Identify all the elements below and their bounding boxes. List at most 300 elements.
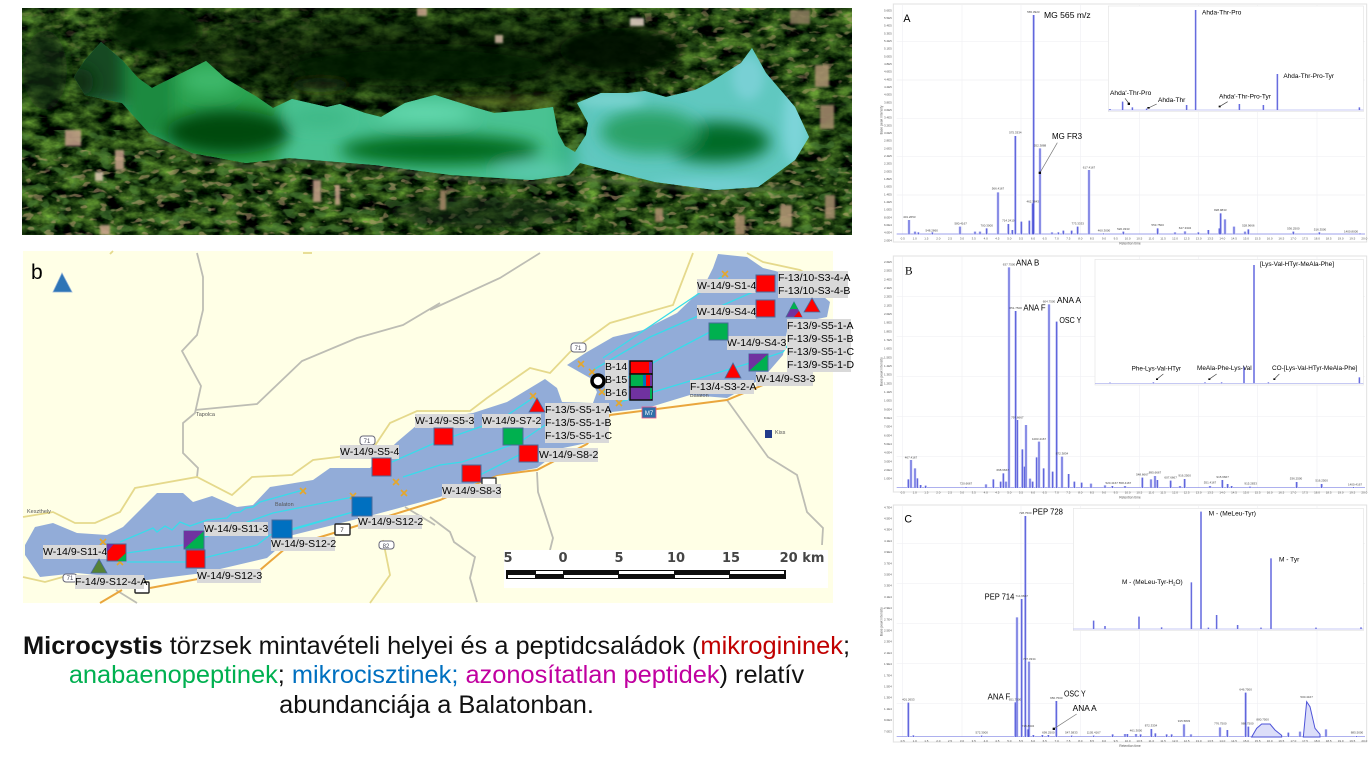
axis A labels: 1.5 [924, 236, 929, 240]
axis B labels: 6.0E4 [884, 433, 892, 437]
B peak labels: 548.6667 [1136, 473, 1149, 477]
C peak labels: 872.3334 [1145, 724, 1158, 728]
site labels: W-14/9-S8-2 [539, 449, 598, 461]
axis B labels: 2.0 [936, 490, 941, 494]
cyan transect lines [120, 274, 790, 562]
axis B labels: 16.5 [1278, 490, 1285, 494]
axis C labels: 3.0 [960, 739, 964, 743]
axis A labels: 3.5 [972, 236, 976, 240]
axis C labels: 17.0 [1290, 739, 1297, 743]
axis B labels: 1.0 [913, 490, 917, 494]
B peak labels: 915.2833 [1244, 482, 1257, 486]
C peak labels: 880.7500 [1256, 718, 1269, 722]
C peak labels: 699.2500 [1042, 730, 1055, 734]
axis A labels: 14.0 [1219, 236, 1226, 240]
panel letter b: b [31, 261, 43, 284]
axis A labels: 11.5 [1160, 236, 1166, 240]
chromatogram A trace [897, 15, 1365, 234]
C peak labels: 776.7500 [1214, 722, 1227, 726]
B peak labels: 551.4167 [1204, 481, 1217, 485]
B peak labels: 558.4167 [1119, 481, 1132, 485]
axis B labels: 1.2E5 [884, 381, 892, 385]
axis C labels: 16.5 [1278, 739, 1285, 743]
axis C labels: 0.5 [901, 739, 905, 743]
axis B labels: 10.0 [1125, 490, 1131, 494]
axis A labels: Base peak intensity [880, 105, 884, 134]
axis C labels: 1.5 [924, 739, 929, 743]
axis A labels: 2.0 [936, 236, 941, 240]
axis B labels: Base peak intensity [880, 357, 884, 386]
axis C labels: 2.9E4 [884, 606, 892, 610]
axis A labels: 5.0 [1007, 236, 1012, 240]
axis A labels: 2.0E4 [884, 238, 892, 242]
B peak labels: 637.7500 [1003, 263, 1016, 267]
axis A labels: 18.5 [1326, 236, 1332, 240]
B peak labels: 720.6667 [960, 482, 973, 486]
B main labels: ANA F [1023, 303, 1046, 313]
axis C labels: 2.0 [936, 739, 941, 743]
axis B labels: 18.5 [1326, 490, 1332, 494]
axis A labels: 19.5 [1349, 236, 1356, 240]
B inset spectrum: CO-[Lys-Val-HTyr-MeAla-Phe] [1272, 365, 1357, 372]
triangle site markers [91, 298, 820, 573]
axis C labels: 18.5 [1326, 739, 1332, 743]
site labels: F-13/9-S5-1-C [787, 346, 855, 358]
axis B labels: 13.0 [1196, 490, 1202, 494]
axis C labels: 4.0 [984, 739, 988, 743]
axis C labels: 19.0 [1338, 739, 1344, 743]
axis B labels [880, 260, 1368, 499]
axis B labels: 3.5 [972, 490, 976, 494]
road shields [63, 343, 772, 593]
road shields: 71 [575, 346, 582, 352]
axis A labels: 3.6E5 [884, 108, 892, 112]
axis B labels: 8.0E4 [884, 416, 892, 420]
axis C labels: 8.5 [1090, 739, 1094, 743]
south shore settlement band [150, 136, 790, 193]
axis C labels: 12.5 [1184, 739, 1190, 743]
chromatogram B trace [897, 267, 1365, 488]
axis A labels: 5.6E5 [884, 8, 892, 12]
axis C labels: 5.0 [1007, 739, 1012, 743]
yellow roads [23, 251, 825, 603]
site labels: W-14/9-S12-2 [271, 538, 336, 550]
site labels: B-14 [605, 361, 627, 373]
axis A labels: 1.2E5 [884, 200, 892, 204]
axis A labels: 1.6E5 [884, 185, 892, 189]
A inset spectrum [1108, 6, 1363, 112]
axis C labels: 7.0E3 [884, 729, 892, 733]
axis B labels: 4.0E4 [884, 451, 892, 455]
C peak labels: 461.3000 [1130, 729, 1143, 733]
site labels: W-14/9-S4-4 [697, 306, 756, 318]
axis B labels: 1.7E5 [884, 338, 892, 342]
axis A labels: 9.5 [1114, 236, 1118, 240]
C main labels: ANA F [988, 691, 1010, 701]
axis A labels: 2.8E5 [884, 139, 892, 143]
C peak labels: 500.4167 [1300, 695, 1313, 699]
road shields: 71 [364, 439, 371, 445]
scale bar: 5 [503, 551, 513, 566]
C peak labels: 737.3334 [1023, 657, 1036, 661]
axis C labels: 7.5 [1066, 739, 1071, 743]
axis A labels: 4.0 [984, 236, 988, 240]
A main labels: MG FR3 [1052, 131, 1082, 141]
axis C labels: 4.7E4 [884, 505, 892, 509]
axis A labels: 9.0 [1102, 236, 1106, 240]
axis A labels: 5.4E5 [884, 24, 892, 28]
axis A labels: 12.5 [1184, 236, 1190, 240]
A peak labels: 401.2653 [903, 215, 916, 219]
axis A labels: 4.2E5 [884, 85, 892, 89]
axis C labels: 9.0E3 [884, 718, 892, 722]
axis A labels: 16.0 [1267, 236, 1273, 240]
road shields: 7 [340, 528, 344, 534]
place names: Balaton [275, 502, 294, 508]
axis C labels: 17.5 [1302, 739, 1308, 743]
axis B labels: 5.5 [1019, 490, 1023, 494]
C peak labels: 651.7500 [1009, 698, 1022, 702]
axis A labels: 1.0 [913, 236, 917, 240]
B main labels [1016, 258, 1082, 325]
axis A labels: 2.2E5 [884, 162, 892, 166]
square site markers [107, 275, 775, 568]
site labels: F-13/5-S5-1-B [545, 417, 612, 429]
axis B labels: 12.0 [1172, 490, 1178, 494]
axis A labels: 1.8E5 [884, 177, 892, 181]
axis C labels: 2.5 [948, 739, 952, 743]
caption: anabaenopeptinek; mikrocisztinek; azonosítatlan peptidek) relatív [69, 661, 804, 689]
axis A labels: 4.0E4 [884, 231, 892, 235]
C peak labels: 572.3000 [975, 730, 988, 734]
axis C labels: 15.0 [1243, 739, 1249, 743]
site labels: W-14/9-S5-3 [415, 415, 474, 427]
C peak labels: 915.5833 [1178, 719, 1191, 723]
axis B labels: 9.0 [1102, 490, 1106, 494]
axis C labels: Base peak intensity [880, 607, 884, 636]
axis B labels: 1.6E5 [884, 347, 892, 351]
axis A labels: 6.0 [1031, 236, 1035, 240]
axis C labels: 4.1E4 [884, 539, 892, 543]
C inset spectrum: O) [1175, 579, 1183, 586]
axis A labels: 6.5 [1043, 236, 1047, 240]
C peak labels: 656.7500 [1050, 696, 1063, 700]
axis B labels: 19.5 [1349, 490, 1356, 494]
site labels: F-13/10-S3-4-A [778, 272, 850, 284]
axis A labels: 5.0E5 [884, 54, 892, 58]
axis B labels: 15.0 [1243, 490, 1249, 494]
C inset spectrum: M - (MeLeu-Tyr-H [1122, 579, 1175, 586]
site labels: W-14/9-S11-4 [43, 546, 108, 558]
A peak labels: 647.3334 [1179, 226, 1192, 230]
axis B labels: 2.5 [948, 490, 952, 494]
axis B labels: Retention time [1119, 495, 1141, 499]
axis C labels: 2.7E4 [884, 617, 892, 621]
axis B labels: 16.0 [1267, 490, 1273, 494]
C peak labels: 988.7500 [1241, 722, 1254, 726]
place names: Tapolca [196, 412, 216, 418]
C inset spectrum: M - Tyr [1279, 556, 1300, 563]
axis C labels: 14.0 [1219, 739, 1226, 743]
axis B labels: 5.0 [1007, 490, 1012, 494]
site labels: F-13/9-S5-1-B [787, 333, 854, 345]
C inset spectrum: 2 [1173, 581, 1176, 586]
scale bar: 5 [614, 551, 624, 566]
site labels: F-14/9-S12-4-A [75, 576, 147, 588]
A peak labels: 700.3000 [980, 223, 993, 227]
site labels: F-13/5-S5-1-A [545, 404, 612, 416]
axis A labels: 4.6E5 [884, 70, 892, 74]
Balaton lake polygon on map [25, 254, 830, 580]
axis C labels: 4.5 [995, 739, 1000, 743]
axis C labels: 3.9E4 [884, 550, 892, 554]
axis C labels: 13.0 [1196, 739, 1202, 743]
axis C labels: 9.5 [1114, 739, 1118, 743]
site labels: W-14/9-S3-3 [756, 373, 815, 385]
C inset spectrum [1073, 508, 1363, 631]
axis A labels: 11.0 [1149, 236, 1154, 240]
axis B labels: 19.0 [1338, 490, 1344, 494]
site labels: W-14/9-S12-3 [197, 570, 262, 582]
scale bar: 0 [558, 551, 568, 566]
C main labels: ANA A [1073, 703, 1097, 713]
site labels: B-16 [605, 387, 627, 399]
C panel letter: C [904, 514, 912, 526]
site labels: W-14/9-S7-2 [482, 415, 541, 427]
place names: Keszthely [27, 509, 51, 515]
axis B labels: 1.1E5 [884, 390, 892, 394]
axis B labels: 11.5 [1160, 490, 1166, 494]
B peak labels: 915.6667 [1216, 475, 1229, 479]
axis B labels: 9.5 [1114, 490, 1118, 494]
lake algal bloom water surface [74, 42, 809, 190]
A peak labels: 714.2410 [1002, 218, 1015, 222]
site labels: F-13/9-S5-1-D [787, 359, 855, 371]
axis A labels: 5.5E5 [884, 16, 892, 20]
axis A labels [880, 8, 1368, 245]
axis C labels: 10.5 [1136, 739, 1143, 743]
A peak labels: 580.4167 [954, 222, 967, 226]
axis A labels: 20.0 [1361, 236, 1368, 240]
axis B labels: 1.4E5 [884, 364, 892, 368]
axis B labels: 10.5 [1136, 490, 1143, 494]
axis A labels: 5.3E5 [884, 31, 892, 35]
A peak labels: 548.2860 [925, 228, 938, 232]
B peak labels: 607.6667 [1164, 475, 1177, 479]
site labels: F-13/5-S5-1-C [545, 430, 613, 442]
south orange road [100, 372, 800, 603]
axis C labels: 1.7E4 [884, 673, 892, 677]
axis C labels: 20.0 [1361, 739, 1368, 743]
axis B labels: 3.0E4 [884, 459, 892, 463]
axis A labels: 10.5 [1136, 236, 1143, 240]
axis A labels: 3.0E5 [884, 131, 892, 135]
axis C labels: 2.3E4 [884, 640, 892, 644]
B peak labels: 797.6667 [1011, 415, 1024, 419]
axis C labels: 2.1E4 [884, 651, 892, 655]
site labels: B-15 [605, 374, 627, 386]
axis A labels: 13.5 [1207, 236, 1214, 240]
C main labels: OSC Y [1064, 688, 1086, 698]
axis A labels: 15.0 [1243, 236, 1249, 240]
north triangle icon [53, 273, 72, 292]
axis B labels: 2.0E4 [884, 468, 892, 472]
C peak labels: 714.6667 [1015, 594, 1028, 598]
C peak labels: 646.7500 [1239, 688, 1252, 692]
axis A labels: 15.5 [1255, 236, 1261, 240]
axis C labels: 4.3E4 [884, 528, 892, 532]
site labels: W-14/9-S4-3 [727, 337, 786, 349]
A inset spectrum: Ahda'-Thr-Pro [1110, 90, 1152, 97]
axis C labels: 14.5 [1231, 739, 1237, 743]
axis B labels: 18.0 [1314, 490, 1320, 494]
axis C labels: 19.5 [1349, 739, 1356, 743]
chromatogram C trace [897, 516, 1365, 737]
axis C labels: 2.5E4 [884, 629, 892, 633]
axis A labels: 14.5 [1231, 236, 1237, 240]
A main labels: MG 565 m/z [1044, 10, 1091, 20]
axis C labels: 3.3E4 [884, 584, 892, 588]
A peak labels: 528.9666 [1242, 224, 1255, 228]
B inset spectrum: Phe-Lys-Val-HTyr [1132, 365, 1182, 372]
C main labels [985, 507, 1097, 713]
axis B labels: 4.5 [995, 490, 1000, 494]
C peak labels: 401.2653 [902, 698, 915, 702]
site labels: W-14/9-S12-2 [358, 516, 423, 528]
split markers [107, 354, 768, 561]
axis B labels: 14.5 [1231, 490, 1237, 494]
axis B labels: 7.0E4 [884, 425, 892, 429]
site labels: W-14/9-S11-3 [204, 523, 269, 535]
axis C labels: 18.0 [1314, 739, 1320, 743]
axis B labels: 1.8E5 [884, 329, 892, 333]
scale bar [503, 550, 828, 588]
B peak labels: 516.2500 [1315, 479, 1328, 483]
C inset spectrum: M - (MeLeu-Tyr) [1209, 511, 1256, 518]
axis B labels: 1.0E5 [884, 399, 892, 403]
axis A labels: 3.2E5 [884, 123, 892, 127]
C peak labels: 728.7500 [1019, 511, 1032, 515]
B inset spectrum: [Lys-Val-HTyr-MeAla-Phe] [1260, 261, 1334, 268]
axis B labels: 7.5 [1066, 490, 1071, 494]
B peak labels: 536.2500 [1290, 477, 1303, 481]
axis A labels: 4.8E5 [884, 62, 892, 66]
site labels: F-13/9-S5-1-A [787, 320, 854, 332]
axis B labels: 6.0 [1031, 490, 1035, 494]
axis A labels: 7.5 [1066, 236, 1071, 240]
axis C labels: 13.5 [1207, 739, 1214, 743]
axis A labels: 3.4E5 [884, 116, 892, 120]
axis B labels: 8.0 [1078, 490, 1083, 494]
A peak labels: 516.3500 [1314, 228, 1327, 232]
A inset spectrum: Ahda'-Thr-Pro-Tyr [1219, 93, 1272, 100]
A inset spectrum: Ahda-Thr [1158, 97, 1186, 104]
B-14 B-15 B-16 stacked bars [630, 361, 652, 400]
C main labels: PEP 728 [1033, 507, 1063, 517]
axis B labels: 2.2E5 [884, 295, 892, 299]
axis B labels: 12.5 [1184, 490, 1190, 494]
grey roads [116, 253, 823, 603]
axis A labels: 8.0 [1078, 236, 1083, 240]
axis C labels: 16.0 [1267, 739, 1273, 743]
axis A labels: 10.0 [1125, 236, 1131, 240]
satellite image of Lake Balaton [22, 6, 852, 235]
orange waypoint crosses [100, 271, 728, 565]
scale bar: 15 [722, 551, 740, 566]
axis A labels: 3.0 [960, 236, 964, 240]
C peak labels: 547.5833 [1065, 730, 1078, 734]
chromatogram panel B [880, 256, 1368, 499]
axis B labels: 2.4E5 [884, 277, 892, 281]
road shields: M7 [645, 411, 654, 417]
site labels: W-14/9-S5-4 [340, 446, 399, 458]
axis C labels: 10.0 [1125, 739, 1131, 743]
axis A labels: 12.0 [1172, 236, 1178, 240]
axis C labels: 7.0 [1055, 739, 1059, 743]
B peak labels: 916.2500 [1178, 474, 1191, 478]
axis C labels: 11.0 [1149, 739, 1154, 743]
A peak labels: 565.3923 [1027, 10, 1040, 14]
axis B labels: 9.0E4 [884, 407, 892, 411]
caption: abundanciája a Balatonban. [279, 691, 594, 719]
axis A labels: 19.0 [1338, 236, 1344, 240]
axis A labels: 4.4E5 [884, 77, 892, 81]
C main labels: PEP 714 [985, 591, 1015, 601]
B peak labels: 872.3834 [1056, 452, 1069, 456]
A peak labels: 575.3334 [1009, 131, 1022, 135]
axis B labels: 1.5 [924, 490, 929, 494]
A peak labels: 553.7500 [1151, 223, 1164, 227]
axis C labels: 4.5E4 [884, 517, 892, 521]
C peak labels: 885.5000 [1351, 730, 1364, 734]
axis C labels: 9.0 [1102, 739, 1106, 743]
axis A labels: 17.5 [1302, 236, 1308, 240]
place names: Kiss [775, 430, 786, 436]
chromatogram panel A [880, 4, 1368, 245]
A peak labels: 460.3000 [1098, 229, 1111, 233]
A peak labels: 536.2500 [1287, 227, 1300, 231]
B main labels: OSC Y [1059, 315, 1082, 325]
A peak labels: 566.4167 [992, 187, 1005, 191]
B main labels: ANA B [1016, 258, 1040, 268]
A arrow to MG FR3 [1040, 143, 1057, 173]
caption: Microcystis törzsek mintavételi helyei és a peptidcsaládok (mikrogininek; [23, 632, 850, 660]
axis B labels: 6.5 [1043, 490, 1047, 494]
axis A labels: 18.0 [1314, 236, 1320, 240]
axis C labels: 6.0 [1031, 739, 1035, 743]
axis A labels: 6.0E4 [884, 223, 892, 227]
site labels: W-14/9-S1-4 [697, 280, 756, 292]
C arrow to ANA A [1054, 714, 1077, 729]
axis B labels: 7.0 [1055, 490, 1059, 494]
B panel letter: B [905, 265, 913, 277]
axis B labels: 5.0E4 [884, 442, 892, 446]
axis B labels: 1.0E4 [884, 477, 892, 481]
axis A labels: 2.5 [948, 236, 952, 240]
axis A labels: 7.0 [1055, 236, 1059, 240]
axis A labels: 5.5 [1019, 236, 1023, 240]
axis B labels: 1.9E5 [884, 321, 892, 325]
axis B labels: 2.5E5 [884, 269, 892, 273]
axis A labels: 2.4E5 [884, 154, 892, 158]
axis C labels: 6.5 [1043, 739, 1047, 743]
axis B labels: 17.0 [1290, 490, 1297, 494]
B peak labels: 895.6667 [1149, 471, 1162, 475]
B inset spectrum [1095, 259, 1363, 385]
axis C labels: 8.0 [1078, 739, 1083, 743]
axis B labels: 15.5 [1255, 490, 1261, 494]
axis A labels: 0.5 [901, 236, 905, 240]
